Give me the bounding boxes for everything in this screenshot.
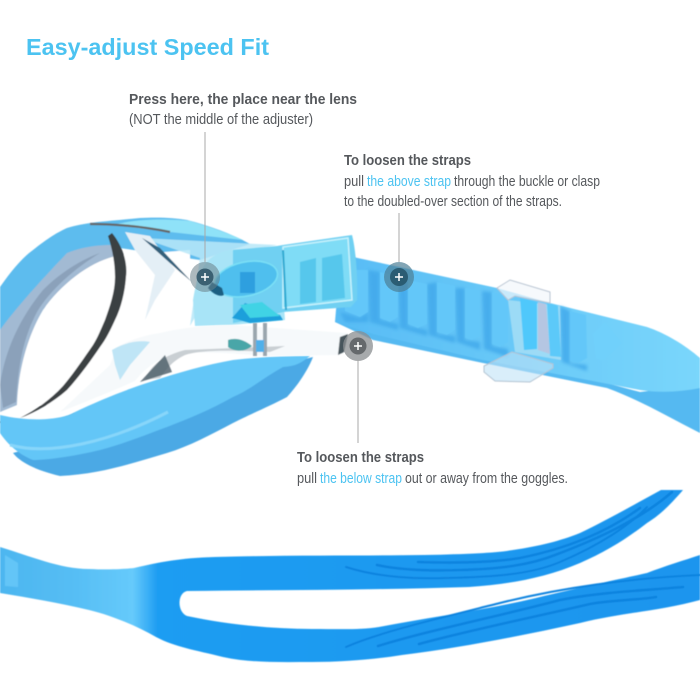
- lower bridge glass: [60, 323, 348, 412]
- callout text: above strap: the above strap: [367, 173, 451, 190]
- goggle lens frame: [0, 218, 285, 424]
- frame inner grey band: [0, 245, 113, 412]
- title: Easy-adjust Speed Fit: [26, 34, 269, 60]
- small tab on strap: [5, 555, 18, 587]
- frame outer band: [0, 218, 250, 412]
- strap: upper adjustable strap: [335, 257, 700, 433]
- lens black rim arc: [20, 233, 126, 418]
- callout: above strap: [344, 152, 600, 262]
- goggle lower gasket: [0, 356, 313, 476]
- callout text: below strap: the below strap: [320, 470, 402, 487]
- callout text: below strap: To loosen the straps: [297, 449, 424, 466]
- callout text: below strap: [297, 449, 568, 487]
- rib: strap grooves: [346, 492, 700, 647]
- callout text: above strap: pull: [344, 173, 364, 190]
- leader line: above strap: [398, 213, 400, 262]
- callout: below strap: [297, 360, 568, 487]
- lens opening and bridge area: [17, 250, 190, 405]
- callout text: below strap: out or away from the goggles.: [405, 470, 568, 487]
- hotspot: below strap: [343, 331, 373, 361]
- adjuster housing: [208, 235, 357, 323]
- callout text: press here: [129, 91, 357, 128]
- hotspot: above strap: [384, 262, 414, 292]
- leader line: below strap: [357, 360, 359, 443]
- callout: press here: [129, 91, 357, 262]
- arrow-shaped stopper: [593, 322, 622, 360]
- hotspot: press point near lens: [190, 262, 220, 292]
- buckle clip: [484, 280, 561, 382]
- callout text: above strap: to the doubled-over section of the straps.: [344, 193, 562, 210]
- callout text: above strap: To loosen the straps: [344, 152, 471, 169]
- nose bridge upper glass: [142, 238, 277, 326]
- leader line: press here: [204, 132, 206, 262]
- callout text: below strap: pull: [297, 470, 317, 487]
- callout text: press here: (NOT the middle of the adjuster): [129, 111, 313, 128]
- ribs on strap: [340, 270, 622, 371]
- callout text: above strap: through the buckle or clasp: [454, 173, 600, 190]
- callout text: press here: Press here, the place near the lens: [129, 91, 357, 108]
- strap: lower looped back strap: [0, 490, 700, 662]
- callout text: above strap: [344, 152, 600, 210]
